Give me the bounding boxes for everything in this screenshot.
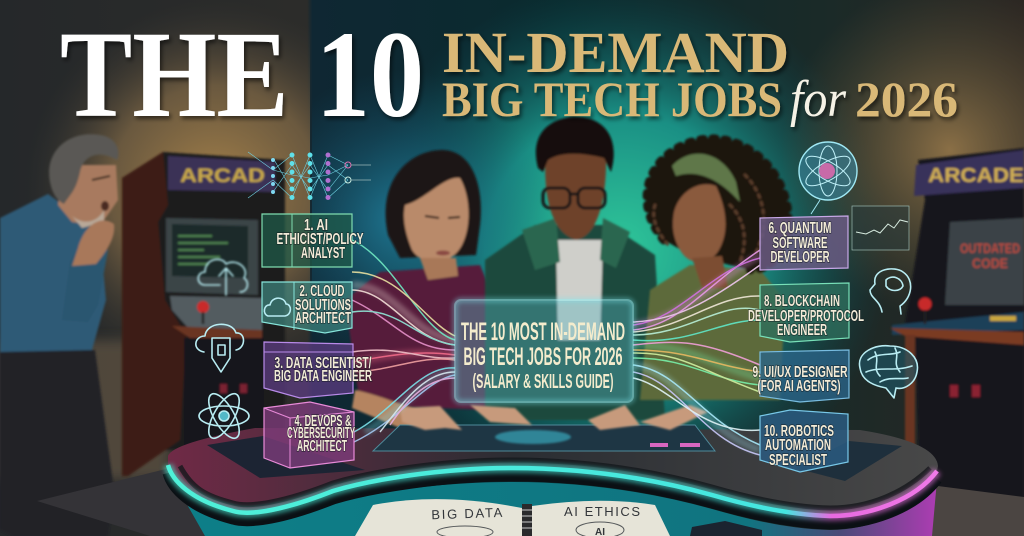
title: for <box>790 71 847 128</box>
left arcade cabinet <box>122 152 285 476</box>
job box 10: SPECIALIST <box>769 452 827 469</box>
job box 1 <box>262 214 364 267</box>
outdated code text <box>960 240 1020 271</box>
icon: cloud upload <box>198 259 247 295</box>
arcade marquee text: ARCADE <box>928 165 1024 187</box>
job box 6: SOFTWARE <box>772 235 828 252</box>
notebook: BIG DATA <box>431 505 503 522</box>
title: IN-DEMAND <box>442 20 789 85</box>
job box 8 <box>748 283 864 342</box>
job box 8: ENGINEER <box>777 322 827 339</box>
job box 4 <box>264 402 355 468</box>
job box 1: ETHICIST/POLICY <box>276 231 364 248</box>
phone <box>690 521 762 536</box>
panel: center title card: (SALARY & SKILLS GUIDE) <box>472 371 614 393</box>
job box 10: 10. ROBOTICS <box>764 423 834 440</box>
job box 8: 8. BLOCKCHAIN <box>764 293 840 310</box>
title: THE 10 <box>60 6 424 143</box>
icon: AI head <box>870 269 911 314</box>
job box 2: ARCHITECT <box>295 310 351 327</box>
icon: neural network <box>248 152 371 199</box>
job box 3: 3. DATA SCIENTIST/ <box>274 355 372 372</box>
right arcade cabinet <box>890 148 1024 500</box>
job box 4: CYBERSECURITY <box>287 425 355 442</box>
right woman <box>640 139 788 400</box>
job box 9: (FOR AI AGENTS) <box>758 378 840 395</box>
job box 10: AUTOMATION <box>765 437 831 454</box>
job box 3 <box>264 342 372 398</box>
job box 1: ANALYST <box>301 245 345 262</box>
job box 1: 1. AI <box>304 217 328 234</box>
panel: center title card: THE 10 MOST IN-DEMAND <box>461 318 625 346</box>
center touchscreen <box>373 425 715 451</box>
title: BIG TECH JOBS <box>442 71 782 127</box>
job box 6: 6. QUANTUM <box>768 220 832 237</box>
icon: brain <box>859 346 917 398</box>
notebook <box>355 499 670 536</box>
panel: center title card <box>455 300 633 402</box>
icon: stock line chart <box>852 206 909 250</box>
man looking surprised <box>0 134 118 536</box>
hands on touchscreen <box>400 405 708 430</box>
panel: center title card: BIG TECH JOBS FOR 2026 <box>464 343 622 371</box>
left woman <box>345 150 495 432</box>
job box 4: 4. DEVOPS & <box>294 413 352 430</box>
job box 3: BIG DATA ENGINEER <box>274 368 372 385</box>
title: 2026 <box>855 71 958 127</box>
job box 2: 2. CLOUD <box>300 283 344 300</box>
job box 4: ARCHITECT <box>297 438 347 455</box>
job box 6: DEVELOPER <box>770 249 830 266</box>
center man <box>485 117 665 420</box>
neon glow strip <box>168 465 937 516</box>
job box 9: 9. UI/UX DESIGNER <box>752 364 848 381</box>
job box 8: DEVELOPER/PROTOCOL <box>748 308 864 325</box>
light flow streams <box>352 240 760 455</box>
right touchscreen <box>795 441 902 481</box>
curved holographic desk <box>168 425 938 536</box>
job box 6 <box>760 216 848 270</box>
icon: atom <box>199 389 249 443</box>
job box 10 <box>760 410 848 472</box>
outdated code text: CODE <box>972 255 1008 271</box>
notebook: AI ETHICS <box>564 504 640 519</box>
back table surfaces <box>37 468 1024 536</box>
icon: small cloud <box>264 298 290 316</box>
icon: cloud shield <box>196 324 244 372</box>
left touchscreen <box>207 436 365 478</box>
job box 9 <box>752 350 849 402</box>
arcade marquee text: ARCAD <box>180 166 265 187</box>
job box 2: SOLUTIONS <box>295 297 351 314</box>
title <box>60 6 958 143</box>
job box 2 <box>262 282 352 333</box>
icon: quantum sphere <box>799 142 857 214</box>
